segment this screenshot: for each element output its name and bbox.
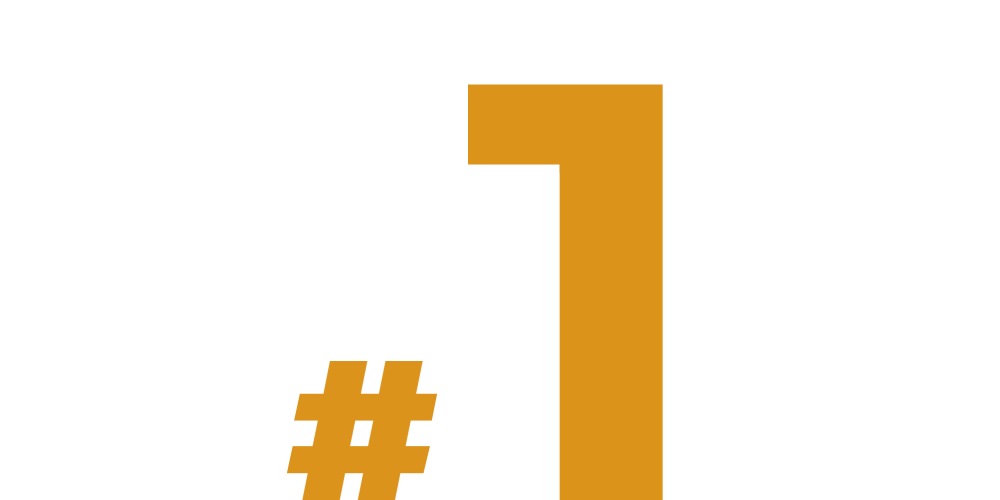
infographic: number one	[286, 84, 663, 500]
numeral one	[468, 84, 663, 500]
